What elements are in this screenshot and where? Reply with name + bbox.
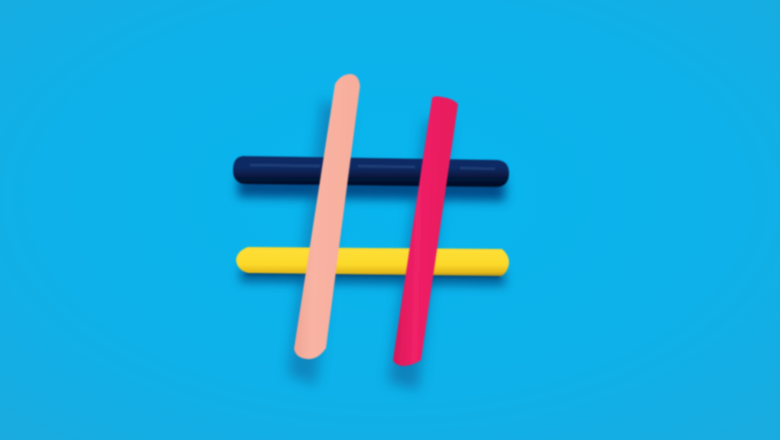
navy stick — [233, 156, 509, 187]
peach stick — [294, 74, 360, 359]
yellow stick — [236, 247, 509, 276]
shadows under sticks — [238, 100, 505, 390]
red stick — [393, 96, 458, 366]
